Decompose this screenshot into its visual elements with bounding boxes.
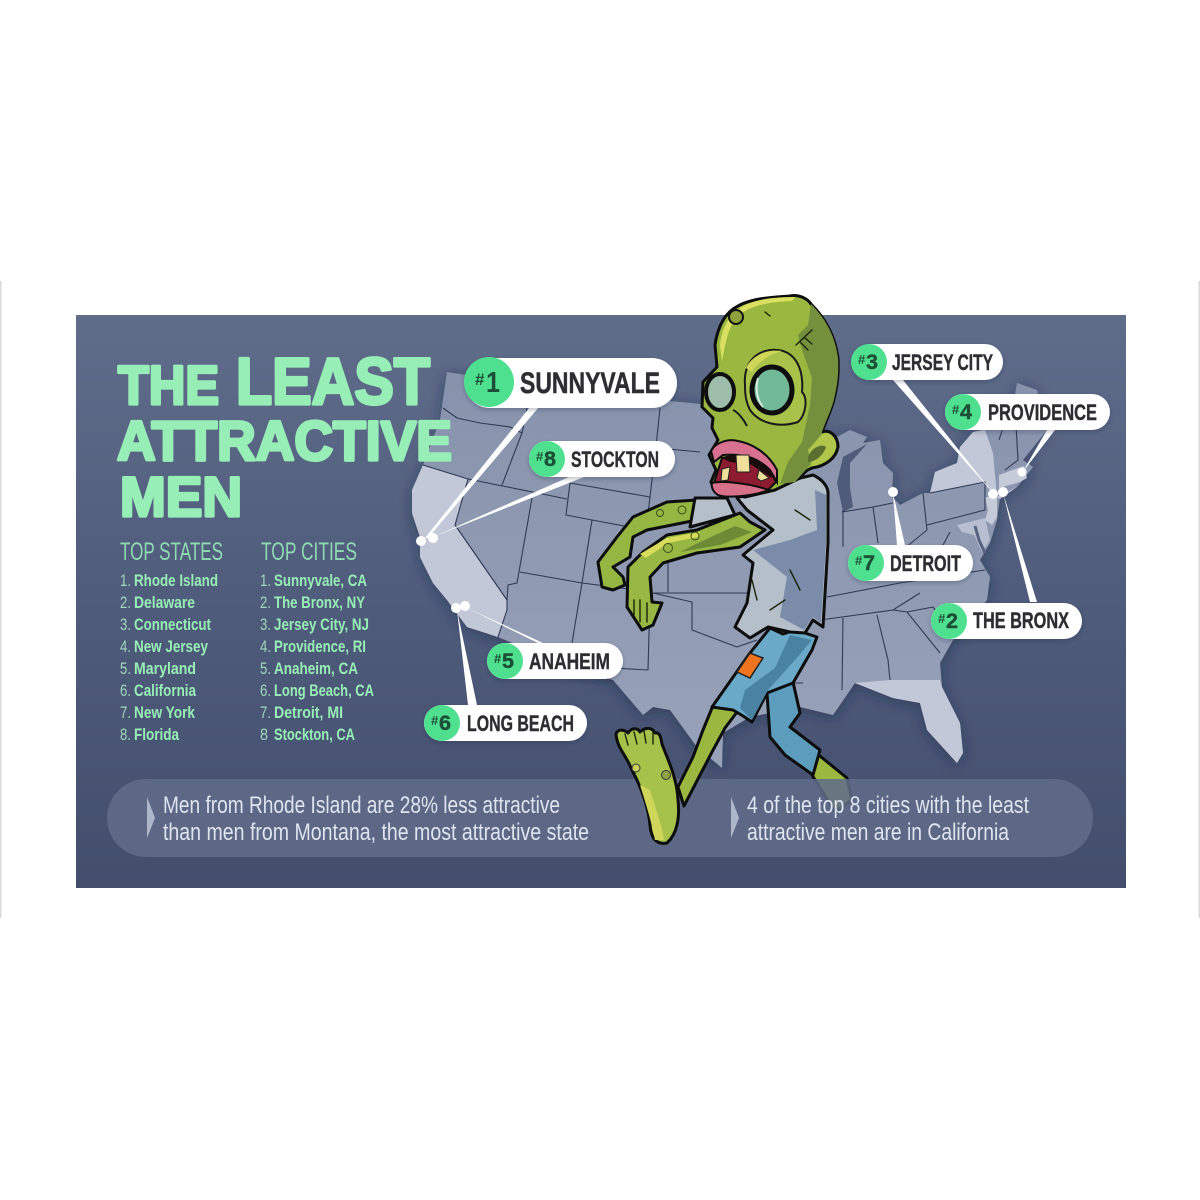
label: #5 Anaheim: ANAHEIM: [529, 649, 610, 674]
label: #8 Stockton: #: [536, 449, 544, 464]
list: top cities: Detroit, MI: [274, 703, 343, 722]
label: #8 Stockton: STOCKTON: [571, 447, 659, 472]
far sleeve cuff: [690, 498, 735, 527]
zombie far leg behind the footer: [812, 752, 852, 812]
list: top states: New Jersey: [134, 637, 208, 656]
list: top cities: Stockton, CA: [274, 725, 355, 744]
list: top cities: Long Beach, CA: [274, 681, 374, 700]
label: #7 Detroit: 7: [863, 552, 875, 575]
list: top cities: Jersey City, NJ: [274, 615, 369, 634]
list: top cities: 8: [260, 725, 268, 744]
label: #7 Detroit: [848, 545, 973, 581]
list: top cities: 5.: [260, 659, 271, 678]
zombie near foot: [616, 728, 679, 843]
label: #1 Sunnyvale: 1: [486, 367, 500, 399]
state: New Jersey: [985, 497, 997, 525]
label: #5 Anaheim: [487, 643, 623, 679]
mouth: [714, 453, 776, 490]
upper lip: [711, 440, 777, 482]
label: #4 Providence: PROVIDENCE: [988, 400, 1097, 425]
list: top states: 1.: [120, 571, 131, 590]
label: #3 Jersey City: 3: [866, 351, 878, 374]
label: #5 Anaheim: #: [494, 651, 502, 666]
ear: [808, 433, 836, 466]
footer fact: California: 4 of the top 8 cities with the least: [747, 792, 1029, 819]
label: #1 Sunnyvale: [464, 357, 677, 408]
zombie far leg jeans: [767, 682, 820, 775]
state: Maryland and Delaware: [957, 518, 990, 552]
zombie shirt: [690, 475, 828, 638]
list: top states: 4.: [120, 637, 131, 656]
list: top cities: Sunnyvale, CA: [274, 571, 367, 590]
list: top cities: 3.: [260, 615, 271, 634]
label: #3 Jersey City: [851, 344, 1003, 380]
left eye: [706, 374, 734, 410]
state: New York: [930, 430, 1017, 499]
footer fact: Rhode Island: Men from Rhode Island are 28% less attractive: [163, 792, 560, 819]
label: #2 The Bronx: THE BRONX: [973, 608, 1069, 633]
label: #4 Providence: #: [952, 402, 960, 417]
list: top cities: 6.: [260, 681, 271, 700]
brow: [746, 351, 782, 372]
label: #5 Anaheim: 5: [502, 650, 514, 673]
list: top states: 6.: [120, 681, 131, 700]
label: #6 Long Beach: [424, 705, 587, 741]
label: #4 Providence: [945, 394, 1110, 430]
label: #7 Detroit: DETROIT: [890, 551, 961, 576]
map: United States: [412, 372, 1047, 768]
label: #7 Detroit: #: [855, 553, 863, 568]
label: #8 Stockton: [529, 441, 675, 477]
connectors and city dots: [416, 380, 1055, 705]
list: top states: [120, 538, 223, 744]
jeans patch: [737, 653, 763, 678]
state: California: [412, 465, 507, 637]
title: THE: [118, 354, 219, 416]
list: top states: Rhode Island: [134, 571, 218, 590]
label: #2 The Bronx: 2: [946, 610, 958, 633]
list: top states: 2.: [120, 593, 131, 612]
zombie near arm: [627, 513, 765, 630]
label: #3 Jersey City: JERSEY CITY: [892, 350, 993, 375]
label: #3 Jersey City: #: [858, 352, 866, 367]
footer fact: Rhode Island: than men from Montana, the most attractive state: [163, 819, 589, 846]
zombie near leg jeans: [712, 628, 817, 722]
list: top states: 8.: [120, 725, 131, 744]
footer fact: California: attractive men are in California: [747, 819, 1010, 846]
forehead highlight: [720, 297, 795, 362]
label: #4 Providence: 4: [960, 401, 972, 424]
list: top states: California: [134, 681, 196, 700]
list: top states: TOP STATES: [120, 538, 223, 566]
title: MEN: [120, 465, 242, 528]
list: top states: Delaware: [134, 593, 195, 612]
list: top cities: [260, 538, 374, 744]
state: Connecticut and Rhode Island: [999, 466, 1027, 488]
zombie illustration: [598, 295, 838, 843]
list: top states: Connecticut: [134, 615, 211, 634]
right eye socket: [745, 350, 805, 425]
lower lip: [712, 482, 769, 497]
list: top cities: TOP CITIES: [261, 538, 357, 566]
label: #6 Long Beach: #: [431, 713, 439, 728]
footer fact: California: [731, 792, 1029, 846]
list: top states: 7.: [120, 703, 131, 722]
title: [117, 344, 452, 528]
list: top states: New York: [134, 703, 195, 722]
label: #2 The Bronx: [931, 603, 1082, 639]
list: top cities: 1.: [260, 571, 271, 590]
label: #2 The Bronx: #: [938, 611, 946, 626]
teeth: [721, 455, 769, 481]
shirt shadow: [753, 490, 826, 630]
label: #1 Sunnyvale: SUNNYVALE: [520, 367, 660, 400]
label: #6 Long Beach: 6: [439, 712, 451, 735]
head bump: [729, 310, 743, 324]
footer pill: [107, 779, 1093, 857]
nose: [733, 410, 747, 426]
list: top states: Maryland: [134, 659, 196, 678]
footer fact: Rhode Island: [147, 792, 589, 846]
list: top cities: The Bronx, NY: [274, 593, 366, 612]
title: ATTRACTIVE: [117, 409, 452, 472]
list: top cities: Providence, RI: [274, 637, 366, 656]
zombie far arm: [598, 500, 697, 590]
title: LEAST: [236, 344, 430, 418]
state: Florida: [855, 680, 963, 763]
page edge lines: [0, 281, 1200, 918]
state borders: [423, 385, 1018, 690]
list: top states: 3.: [120, 615, 131, 634]
Chesapeake Bay: [975, 526, 985, 553]
list: top cities: 2.: [260, 593, 271, 612]
list: top cities: 4.: [260, 637, 271, 656]
label: #6 Long Beach: LONG BEACH: [467, 711, 574, 736]
zombie far lower leg: [678, 703, 737, 806]
label: #8 Stockton: 8: [544, 448, 556, 471]
Lake Michigan cutout: [837, 444, 867, 512]
label: #1 Sunnyvale: #: [475, 370, 485, 389]
list: top states: Florida: [134, 725, 179, 744]
list: top states: 5.: [120, 659, 131, 678]
head shadow: [780, 304, 838, 484]
list: top cities: 7.: [260, 703, 271, 722]
right eye: [752, 367, 792, 413]
zombie head: [702, 295, 838, 497]
panel: background: [76, 315, 1126, 888]
list: top cities: Anaheim, CA: [274, 659, 358, 678]
